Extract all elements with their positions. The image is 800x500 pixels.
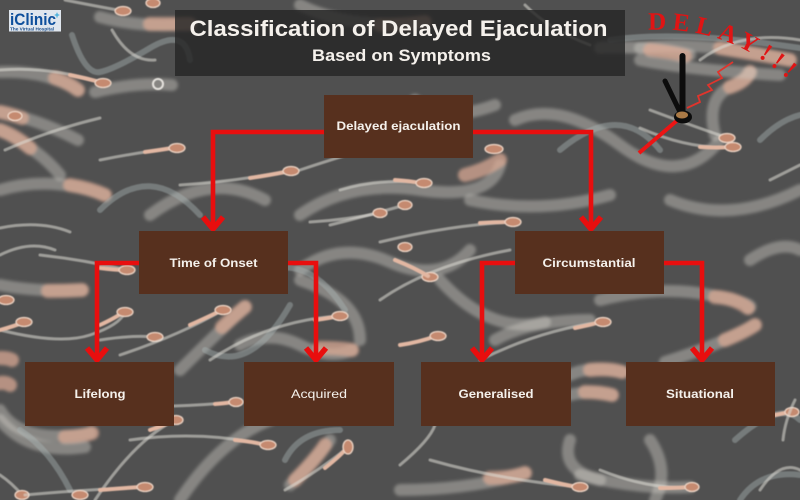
box: acquired: Acquired — [291, 389, 347, 401]
logo: iClinic: + — [54, 10, 60, 20]
clock delay illustration — [638, 13, 797, 154]
box: circumstantial: Circumstantial — [542, 258, 636, 270]
logo: iClinic: iClinic — [10, 10, 56, 29]
arrow: delayed ejaculation to circumstantial — [473, 132, 601, 229]
box: delayed ejaculation — [324, 95, 473, 158]
title panel — [175, 10, 625, 76]
box: acquired — [244, 362, 394, 426]
subtitle: Based on Symptoms — [312, 47, 491, 65]
box: generalised — [421, 362, 571, 426]
arrow: delayed ejaculation to time of onset — [203, 132, 324, 229]
red hand — [639, 118, 680, 153]
arrow: time of onset to lifelong — [87, 263, 139, 360]
box: generalised: Generalised — [458, 389, 534, 401]
box: lifelong: Lifelong — [74, 389, 126, 401]
box: delayed ejaculation: Delayed ejaculation — [336, 121, 460, 133]
long black hand — [680, 56, 686, 112]
title: Classification of Delayed Ejaculation — [190, 16, 608, 41]
box: time of onset — [139, 231, 288, 294]
box: time of onset: Time of Onset — [170, 258, 258, 270]
logo: iClinic: The Virtual Hospital — [10, 26, 54, 32]
box: lifelong — [25, 362, 174, 426]
zigzag second hand — [687, 62, 733, 108]
box: situational: Situational — [666, 389, 734, 401]
box: situational — [626, 362, 775, 426]
arrow: circumstantial to generalised — [472, 263, 515, 360]
arrow: time of onset to acquired — [288, 263, 326, 360]
box: circumstantial — [515, 231, 664, 294]
arrow: circumstantial to situational — [663, 263, 712, 360]
short black hand — [665, 81, 680, 112]
clock hub — [674, 110, 692, 124]
